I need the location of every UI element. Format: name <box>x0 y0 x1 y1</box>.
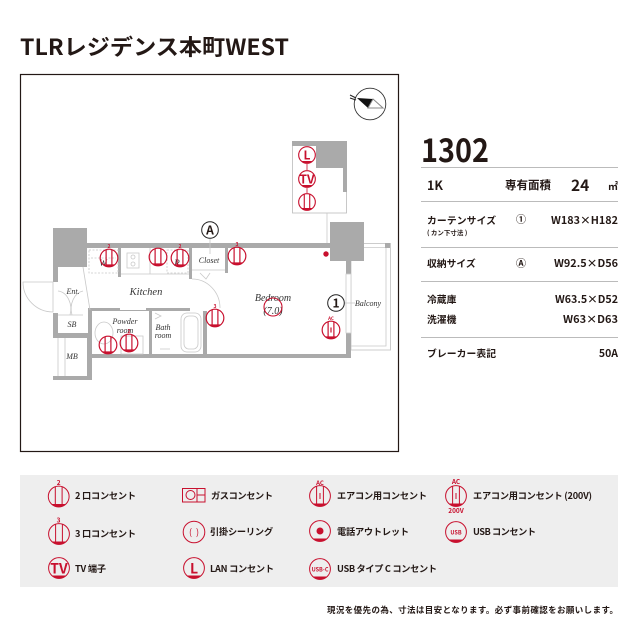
legend: LAN <box>184 558 274 579</box>
room labels: room <box>155 331 172 340</box>
room labels: Powder <box>112 317 138 326</box>
callout 1: 1 <box>332 294 340 312</box>
callout 1 <box>328 294 355 312</box>
legend: TV <box>49 558 106 579</box>
callout A <box>202 222 218 254</box>
legend: ceiling <box>183 521 273 543</box>
legend: 3 outlet: 3 <box>57 514 61 524</box>
layout and area: ㎡ <box>608 178 618 193</box>
panel: floor plan frame <box>20 74 398 452</box>
window <box>346 274 351 333</box>
shaft outlets: TV <box>300 170 315 188</box>
panel: unit details <box>421 126 618 361</box>
walls <box>53 222 364 380</box>
room labels: Closet <box>199 256 220 265</box>
fridge <box>427 292 618 307</box>
legend: ceiling: ( ) <box>189 526 199 538</box>
panel: legend <box>20 475 618 587</box>
curtain size: W183×H182 <box>551 213 618 228</box>
room labels: R <box>173 258 180 268</box>
curtain size: ( カン下寸法 ) <box>427 227 467 237</box>
breaker <box>427 346 618 361</box>
fridge: W63.5×D52 <box>555 292 618 307</box>
shaft outlets: L <box>304 146 311 164</box>
legend: USB <box>446 522 536 543</box>
shaft niche <box>292 141 347 243</box>
legend: USB: USB <box>450 528 462 536</box>
room labels: Ent. <box>65 287 80 296</box>
title: TLRレジデンス本町WEST <box>20 30 289 62</box>
legend: LAN: LAN コンセント <box>210 561 274 575</box>
legend: AC 200V: エアコン用コンセント (200V) <box>473 488 592 502</box>
fridge: 冷蔵庫 <box>427 292 457 306</box>
legend: gas <box>182 488 273 502</box>
legend: gas: ガスコンセント <box>211 488 273 502</box>
breaker: ブレーカー表記 <box>427 346 496 360</box>
legend: AC 200V: 200V <box>448 505 465 515</box>
kitchen and room outlets: 3 <box>214 303 217 310</box>
curtain size: カーテンサイズ <box>427 213 496 227</box>
room labels: Bath <box>155 323 171 332</box>
legend: USB-C <box>310 559 437 580</box>
legend: 3 outlet: 3 口コンセント <box>75 526 136 540</box>
layout and area: 1K <box>427 175 443 194</box>
layout and area <box>427 174 618 196</box>
unit number: 1302 <box>421 126 489 172</box>
legend: 3 outlet <box>49 514 136 545</box>
room labels: Kitchen <box>129 287 162 298</box>
legend: ceiling: 引掛シーリング <box>210 524 273 538</box>
room labels: Bedroom <box>255 293 291 304</box>
legend: phone <box>310 521 409 542</box>
compass <box>350 88 386 120</box>
kitchen and room outlets: AC <box>327 316 334 322</box>
kitchen and room outlets: 3 <box>236 241 239 248</box>
legend: phone: 電話アウトレット <box>337 524 409 538</box>
breaker: 50A <box>599 346 618 361</box>
callout A: A <box>205 222 214 238</box>
legend: LAN: L <box>190 558 198 578</box>
legend: 2 outlet: 2 口コンセント <box>75 488 136 502</box>
floor plan <box>23 88 390 380</box>
phone outlet <box>323 251 329 257</box>
layout and area: 専有面積 <box>505 177 552 193</box>
kitchen and room outlets: 2 <box>179 243 182 250</box>
shaft outlets <box>299 146 315 211</box>
legend: TV: TV 端子 <box>75 561 106 575</box>
legend: TV: TV <box>50 558 68 578</box>
room labels: (7.0) <box>263 306 283 317</box>
room labels: MB <box>65 352 78 361</box>
legend: AC outlet <box>310 478 427 507</box>
room labels: room <box>117 326 134 335</box>
washer: 洗濯機 <box>427 312 457 326</box>
legend: USB-C: USB タイプ C コンセント <box>337 561 437 575</box>
legend: 2 outlet <box>48 477 136 507</box>
storage size: W92.5×D56 <box>554 256 618 271</box>
washer: W63×D63 <box>563 312 618 327</box>
kitchen and room outlets: 2 <box>108 243 111 250</box>
room labels: SB <box>68 320 77 329</box>
legend: AC outlet: エアコン用コンセント <box>337 488 427 502</box>
kitchen and room outlets: 2 <box>128 328 131 335</box>
legend: AC outlet: AC <box>315 478 324 487</box>
curtain size <box>427 211 618 237</box>
legend: USB-C: USB-C <box>312 566 329 574</box>
legend: AC 200V: AC <box>451 476 461 486</box>
room labels <box>65 256 382 361</box>
fixtures <box>23 248 225 376</box>
storage size <box>427 255 618 271</box>
layout and area: 24 <box>571 174 589 196</box>
footnote: 現況を優先の為、寸法は目安となります。必ず事前確認をお願いします。 <box>327 604 618 616</box>
storage size: 収納サイズ <box>427 256 476 270</box>
room labels: W <box>99 258 108 268</box>
legend: 2 outlet: 2 <box>57 477 61 487</box>
storage size: Ⓐ <box>516 255 526 270</box>
ceiling outlet <box>264 298 282 316</box>
room labels: Balcony <box>355 299 382 308</box>
balcony <box>351 243 390 350</box>
kitchen and room outlets <box>99 241 340 354</box>
legend: AC 200V <box>446 476 592 515</box>
washer <box>427 312 618 327</box>
curtain size: ① <box>516 211 526 226</box>
legend: USB: USB コンセント <box>473 524 536 538</box>
